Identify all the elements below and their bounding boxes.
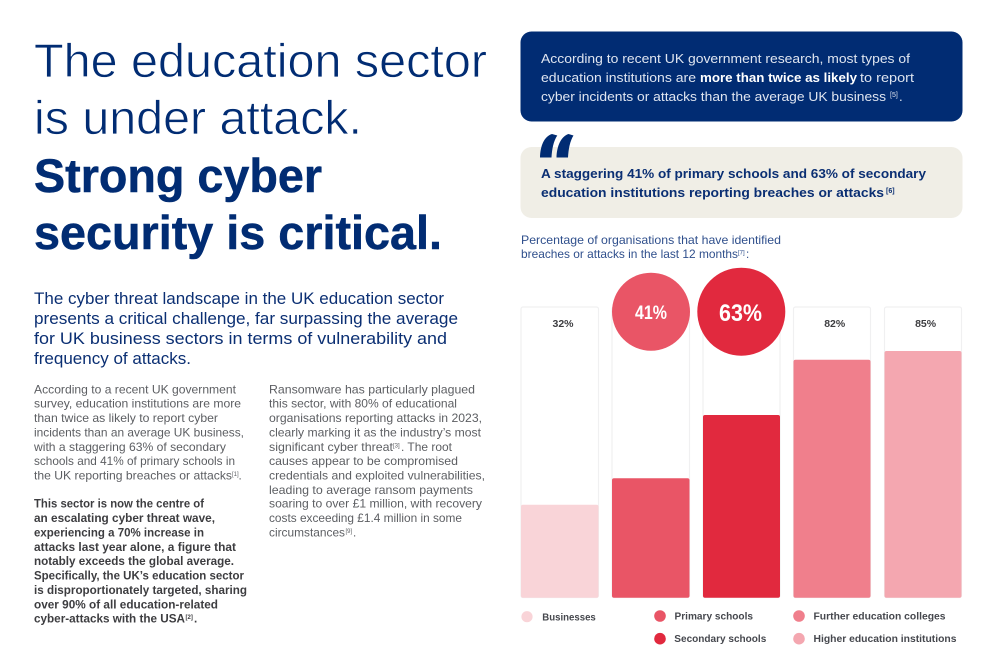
panel: government research callout: [5] (890, 92, 898, 99)
body text: bold threat wave: Specifically, the UK’s education sector (34, 570, 244, 582)
body text: survey findings: with a staggering 63% of secondary (33, 441, 226, 454)
bar: businesses 32%: 32% (552, 318, 574, 330)
intro paragraph: The cyber threat landscape in the UK education sector (34, 290, 445, 308)
panel: government research callout: cyber incidents or attacks than the average UK business (541, 89, 886, 104)
body text: ransomware: . The root (401, 441, 453, 454)
body text: ransomware: credentials and exploited vulnerabilities, (269, 470, 485, 482)
body text: bold threat wave: [2] (186, 615, 193, 621)
body text: bold threat wave: . (194, 613, 197, 626)
callout: 63% circle (697, 268, 785, 356)
body text: survey findings: According to a recent UK government (34, 383, 237, 396)
intro paragraph: presents a critical challenge, far surpassing the average (34, 310, 458, 328)
body text: bold threat wave: notably exceeds the global average. (34, 555, 234, 568)
title: The education sector (34, 34, 487, 87)
intro paragraph: for UK business sectors in terms of vulnerability and (34, 330, 447, 348)
body text: ransomware: circumstances (269, 526, 345, 539)
chart caption: breaches or attacks in the last 12 months (521, 248, 738, 261)
title: security is critical. (34, 206, 442, 259)
body text: survey findings: schools and 41% of primary schools in (34, 455, 235, 468)
bar: further education colleges 82%: 82% (824, 318, 846, 330)
intro paragraph (34, 290, 458, 368)
body text: ransomware: . (353, 526, 356, 539)
panel: government research callout: According to recent UK government research, most types of (541, 51, 910, 66)
body text: survey findings: [1] (232, 472, 239, 478)
legend: Secondary schools (674, 634, 766, 645)
body text: survey findings: the UK reporting breaches or attacks (34, 470, 232, 482)
bar: higher education institutions 85%: 85% (915, 318, 937, 330)
chart caption: Percentage of organisations that have identified (521, 234, 781, 247)
body text: survey findings: survey, education institutions are more (34, 398, 241, 411)
body text: ransomware: [9] (346, 529, 353, 535)
icon: quotation mark (540, 134, 574, 158)
callout: 41% circle: 41% (635, 303, 667, 324)
intro paragraph: frequency of attacks. (34, 350, 191, 368)
panel: government research callout (520, 32, 962, 122)
body text: ransomware (269, 383, 485, 539)
panel: government research callout: education institutions are (541, 70, 696, 85)
body text: ransomware: causes appear to be compromised (269, 455, 458, 468)
panel: staggering quote: education institutions reporting breaches or attacks (541, 185, 884, 200)
legend: Further education colleges (814, 612, 946, 623)
legend: Higher education institutions (814, 634, 957, 645)
chart caption: : (746, 248, 749, 261)
body text: bold threat wave: over 90% of all education-related (34, 598, 218, 611)
body text: ransomware: this sector, with 80% of educational (269, 398, 457, 411)
body text: ransomware: costs exceeding £1.4 million in some (269, 512, 462, 525)
panel: staggering quote: A staggering 41% of primary schools and 63% of secondary (541, 166, 927, 181)
panel: government research callout: . (899, 89, 903, 104)
body text: ransomware: [3] (393, 444, 400, 450)
chart caption (521, 234, 781, 261)
title: Strong cyber (34, 149, 322, 202)
bar: higher education institutions 85% (884, 307, 962, 598)
body text: ransomware: soaring to over £1 million, with recovery (269, 498, 482, 510)
legend: Primary schools (674, 612, 753, 623)
body text: ransomware: clearly marking it as the industry’s most (269, 426, 482, 440)
body text: survey findings (33, 383, 244, 482)
body text: bold threat wave (34, 498, 247, 626)
panel: staggering quote (520, 134, 962, 218)
body text: survey findings: than twice as likely to report cyber (34, 412, 218, 425)
body text: ransomware: organisations reporting attacks in 2023, (269, 412, 482, 425)
body text: bold threat wave: attacks last year alone, a figure that (34, 541, 236, 554)
title: is under attack. (34, 91, 362, 144)
panel: staggering quote: [6] (886, 188, 895, 195)
body text: ransomware: leading to average ransom payments (269, 484, 473, 497)
body text: ransomware: significant cyber threat (269, 441, 394, 454)
body text: survey findings: . (238, 470, 242, 482)
body text: bold threat wave: experiencing a 70% increase in (34, 526, 204, 539)
bar: primary schools 41% (612, 307, 690, 598)
chart caption: [7] (738, 250, 745, 256)
body text: bold threat wave: is disproportionately targeted, sharing (34, 584, 247, 597)
bar: secondary schools 63% (703, 307, 780, 598)
body text: survey findings: incidents than an average UK business, (34, 426, 244, 440)
bar: further education colleges 82% (794, 307, 870, 598)
body text: bold threat wave: This sector is now the centre of (34, 498, 204, 510)
body text: bold threat wave: cyber-attacks with the USA (34, 613, 186, 626)
bar: businesses 32% (521, 307, 598, 598)
callout: 63% circle: 63% (719, 300, 762, 327)
callout: 41% circle (612, 273, 690, 351)
panel: government research callout: more than twice as likely (700, 70, 858, 85)
body text: ransomware: Ransomware has particularly plagued (269, 383, 475, 396)
legend: Businesses (542, 612, 596, 624)
title (34, 34, 487, 259)
bar chart (521, 268, 962, 598)
legend (521, 610, 957, 645)
body text: bold threat wave: an escalating cyber threat wave, (34, 512, 215, 525)
panel: government research callout: to report (860, 70, 914, 85)
